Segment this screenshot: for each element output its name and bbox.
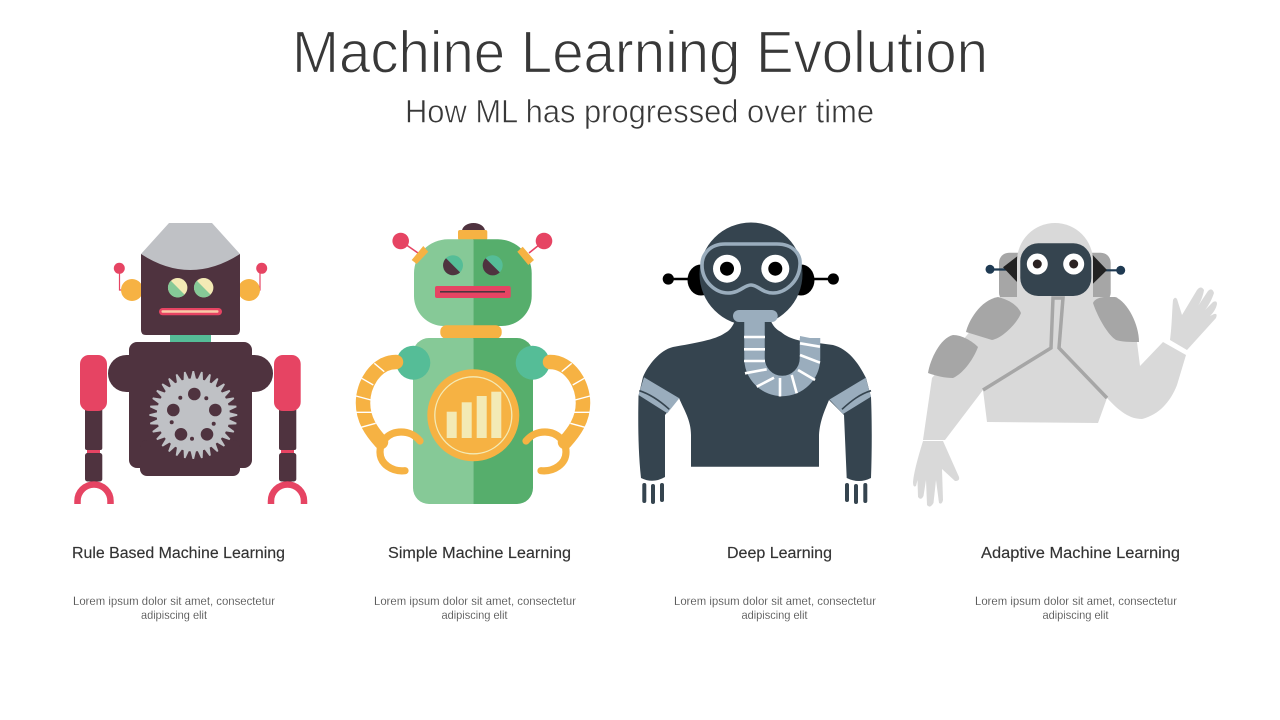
column 3 text: Lorem ipsum dolor sit amet, consectetur [674,594,876,608]
column 1 text: adipiscing elit [141,608,208,622]
shoulders [396,346,550,380]
left arm [78,355,110,504]
backpack [999,253,1111,303]
chart badge [427,369,519,461]
column 2 heading: Simple Machine Learning [388,545,571,562]
torso [108,342,273,476]
subtitle: How ML has progressed over time [405,93,874,129]
breathing tube [733,310,820,396]
column 1 text [73,594,275,622]
column 3 text [674,594,876,622]
head cap [458,223,487,240]
column 4 text: Lorem ipsum dolor sit amet, consectetur [975,594,1177,608]
head [141,223,240,335]
column 4 text: adipiscing elit [1042,608,1109,622]
robot: simple ML [356,223,590,504]
head [414,239,532,326]
chest seams [983,298,1107,398]
shoulder pads [928,297,1139,378]
right arm [271,355,304,504]
neck [170,335,211,343]
gear [149,371,237,459]
column 4 heading: Adaptive Machine Learning [981,545,1180,562]
column 3 heading: Deep Learning [727,545,832,562]
torso [413,338,533,504]
robot: rule based [78,223,304,504]
head [700,222,802,326]
hood [1017,223,1093,300]
left hand [913,441,959,507]
column 4 text [975,594,1177,622]
column 3 text: adipiscing elit [742,608,808,622]
column 1 heading: Rule Based Machine Learning [72,545,285,562]
column 1 text: Lorem ipsum dolor sit amet, consectetur [73,594,275,608]
torso and arms [638,318,872,481]
neck [440,325,502,339]
arm bands [638,377,871,414]
robot: adaptive [913,223,1217,507]
right hand [1170,288,1217,350]
robot: deep learning [638,222,872,502]
face [1020,243,1091,296]
right arm [526,362,590,471]
title: Machine Learning Evolution [292,20,988,86]
column 2 text: Lorem ipsum dolor sit amet, consectetur [374,594,576,608]
ears and antennae [114,263,267,301]
antennae [392,233,552,253]
goggles [702,244,800,293]
torso and arms [923,297,1186,440]
left arm [356,362,420,471]
column 2 text [374,594,576,622]
antenna mounts [412,246,534,265]
antennae [986,255,1125,284]
column 2 text: adipiscing elit [442,608,508,622]
ears and antennae [663,264,839,296]
fingers [644,485,865,502]
